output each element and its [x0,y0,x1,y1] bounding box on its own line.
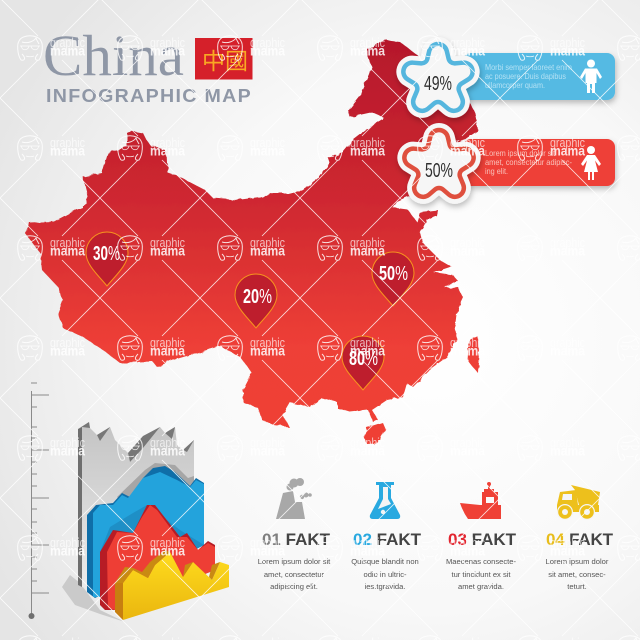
fact 01: 01 FAKT [262,530,331,549]
fact 03 [446,530,517,591]
fact 01 [258,530,331,591]
fact 03: tur tincidunt ex sit [451,570,511,579]
fact 02: 02 FAKT [353,530,422,549]
icon: factory [276,478,312,519]
female statistic text: Lorem ipsum dolor sit [485,149,556,158]
panel: male statistic [403,44,615,111]
fact 03: 03 FAKT [448,530,517,549]
fact 03: amet gravida. [458,582,504,591]
fact 04 [546,530,614,591]
map pin 20%: 20% [243,286,272,308]
female statistic text [485,149,572,176]
fact 04: 04 FAKT [546,530,614,549]
title: INFOGRAPHIC MAP [46,86,252,106]
map pin 30%: 30% [93,243,120,265]
female statistic text: amet, consectetur adipisc- [485,158,572,167]
map pin 50%: 50% [379,263,408,285]
flag badge: 中國 [202,42,248,76]
ruler scale [28,383,49,619]
fact 03: Maecenas consecte- [446,557,517,566]
yellow area series [115,550,229,620]
fact 04: sit amet, consec- [548,570,606,579]
icon: ship [460,482,501,519]
fact 01: Lorem ipsum dolor sit [258,557,331,566]
red area series [100,505,215,610]
island: Hainan [364,423,386,445]
fact 04: Lorem ipsum dolor [546,557,609,566]
chart floor shadow [62,575,125,622]
female star badge [404,130,474,197]
icon: woman [581,146,601,180]
male star badge: 49% [424,73,452,95]
icon: man [580,60,602,93]
island: Taiwan [467,337,479,373]
fact 01: amet, consectetur [264,570,325,579]
icon: truck [557,485,600,520]
fact 02: odio in ultric- [363,570,407,579]
blue area series [87,466,204,598]
fact 02: ies.tgravida. [365,582,405,591]
male statistic text: Morbi semper laoreet enim [485,63,572,72]
map pin 30% [86,232,128,286]
flag badge [195,38,252,80]
3D area chart [62,422,229,622]
male statistic text: ullamcorper quam. [485,81,545,90]
male star badge [403,44,473,111]
male statistic text: ac posuere. Duis dapibus [485,72,566,81]
title: China [43,23,184,88]
fact 01: adipiscing elit. [270,582,318,591]
grey area series [78,422,194,590]
fact 04: teturt. [567,582,587,591]
map pin 50% [372,252,414,306]
female statistic text: ing elit. [485,167,508,176]
fact 02 [351,530,422,591]
title [43,23,252,106]
icon: flask [370,482,400,519]
map pin 80%: 80% [349,348,378,370]
male statistic text [485,63,572,90]
fact 02: Quisque blandit non [351,557,419,566]
map pin 20% [235,274,277,328]
map of China [25,40,479,445]
female star badge: 50% [425,160,453,182]
map pin 80% [342,336,384,390]
panel: female statistic [404,130,615,197]
